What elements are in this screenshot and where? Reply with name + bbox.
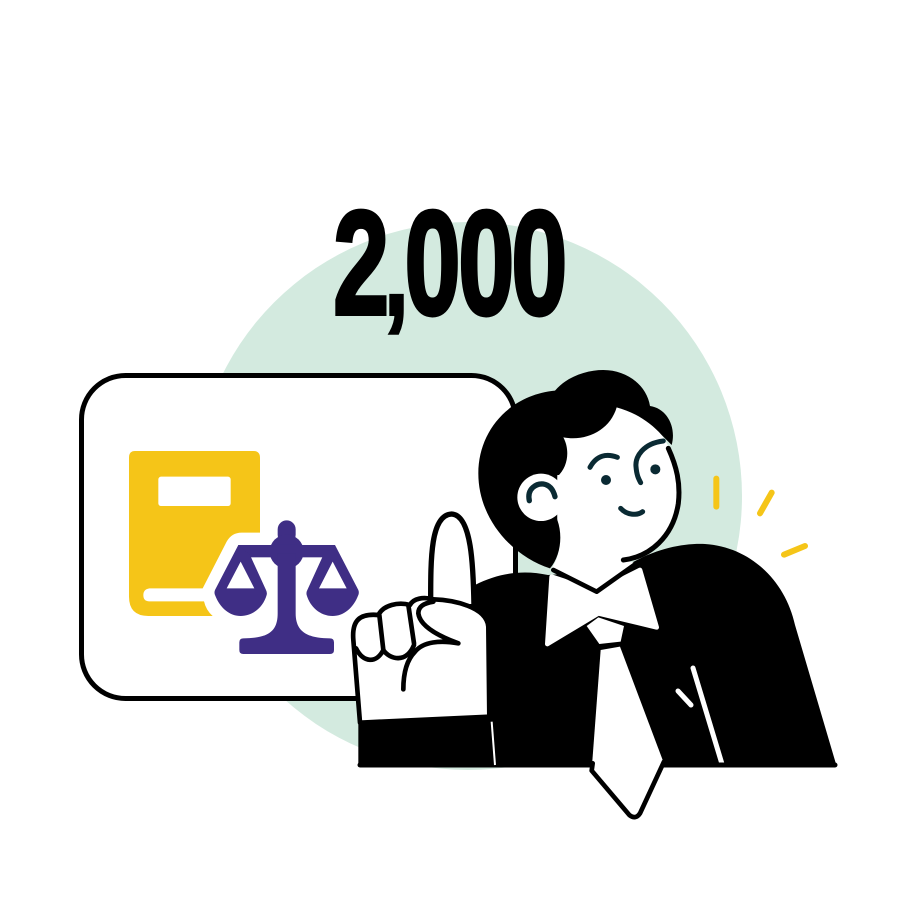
heading: 2,000: , <box>385 205 408 341</box>
figure: hand with raised index finger <box>353 514 495 766</box>
heading: 2,000 <box>333 180 567 346</box>
card panel <box>82 376 516 698</box>
heading: 2,000: 0 <box>405 180 461 346</box>
icon: scales of justice <box>214 520 359 654</box>
figure: head, hair and face <box>478 370 680 590</box>
icon: yellow law book <box>129 451 260 616</box>
background circle <box>194 222 742 770</box>
icon: yellow emphasis sparks <box>716 479 805 555</box>
heading: 2,000: 0 <box>458 180 514 346</box>
heading: 2,000: 2 <box>333 180 389 346</box>
figure: lawyer body in black suit <box>360 544 836 765</box>
heading: 2,000: 0 <box>511 180 567 346</box>
figure: collar and tie <box>547 563 664 817</box>
